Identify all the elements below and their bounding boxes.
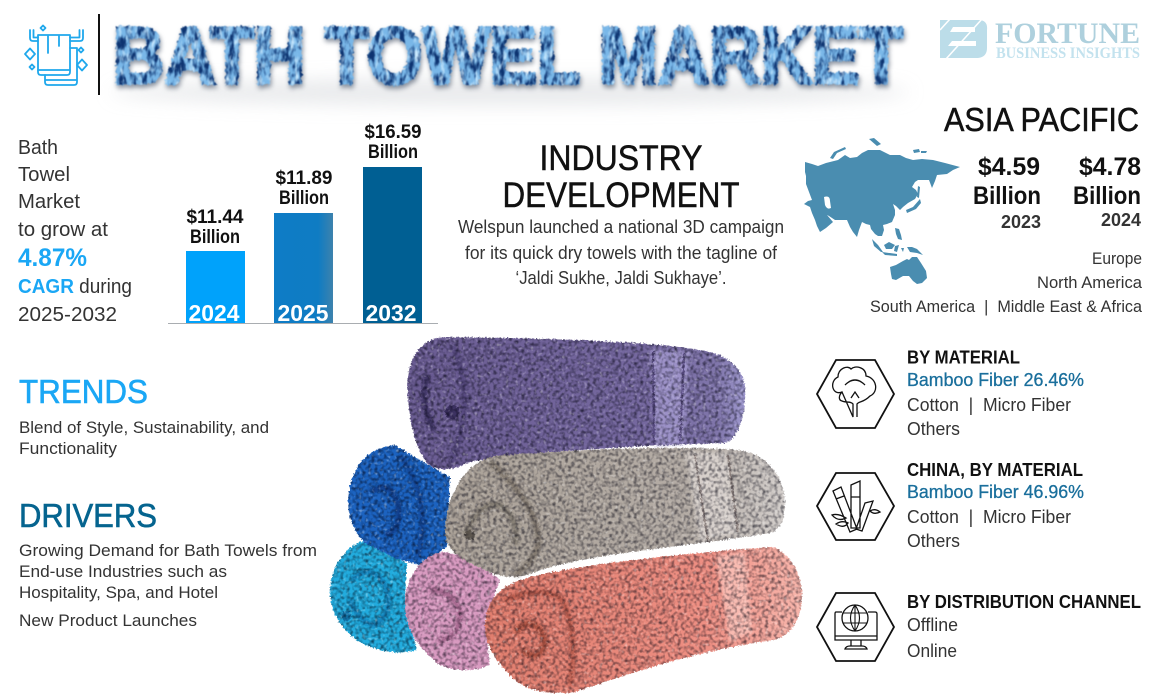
text block: CAGR summary: [18, 136, 132, 326]
towel: grey roll: [445, 448, 785, 577]
text: by material: Bamboo Fiber 26.46%: [907, 370, 1084, 390]
panel: by distribution channel: [817, 592, 1141, 661]
bar 2025: [274, 168, 333, 326]
bar 2032: Billion: [368, 142, 418, 163]
text block: industry development: [458, 217, 784, 288]
heading: industry development: INDUSTRY: [540, 139, 702, 178]
text: by distribution channel: [907, 592, 1141, 661]
icon: bamboo in hexagon: [817, 473, 894, 540]
text: China by material: [907, 460, 1084, 551]
bar 2025: $11.89: [276, 168, 332, 189]
bar 2024: $11.44: [186, 207, 244, 228]
list: other regions: South America | Middle East & Africa: [870, 298, 1143, 316]
text block: industry development: Welspun launched a national 3D campaign: [458, 217, 784, 237]
heading: industry development: [502, 139, 740, 215]
stat: Asia Pacific 2024: [1073, 153, 1141, 230]
text: China by material: Bamboo Fiber 46.96%: [907, 482, 1084, 502]
text: by distribution channel: Online: [907, 641, 957, 661]
text block: trends: Functionality: [19, 439, 118, 458]
bar 2024: [186, 207, 245, 326]
bar 2024: 2024: [188, 300, 240, 326]
logo tagline: BUSINESS INSIGHTS: [996, 45, 1140, 62]
list: other regions: North America: [1037, 274, 1143, 292]
panel: by material: [817, 348, 1084, 439]
stat: Asia Pacific 2024: Billion: [1073, 182, 1141, 210]
text block: CAGR summary: 4.87%: [18, 244, 87, 272]
header divider: [98, 14, 100, 95]
stat: Asia Pacific 2024: 2024: [1101, 210, 1141, 230]
text block: CAGR summary: CAGR during: [18, 275, 132, 298]
bar 2025: Billion: [279, 188, 329, 209]
logo wordmark: FORTUNE: [995, 17, 1140, 50]
title shadow: [110, 79, 910, 105]
text block: CAGR summary: Market: [18, 190, 80, 213]
text: by distribution channel: Offline: [907, 615, 958, 635]
text: China by material: Others: [907, 531, 960, 551]
heading: Asia Pacific: ASIA PACIFIC: [944, 101, 1139, 138]
heading: industry development: DEVELOPMENT: [502, 176, 740, 215]
list: other regions: Europe: [1092, 250, 1142, 268]
panel: China by material: [817, 460, 1084, 551]
title: BATH TOWEL MARKET: [113, 11, 903, 100]
text block: drivers: [19, 541, 317, 630]
text: by material: BY MATERIAL: [907, 348, 1020, 368]
text block: trends: [19, 418, 269, 458]
list: other regions: [870, 250, 1143, 316]
heading: trends: TRENDS: [19, 373, 148, 410]
stat: Asia Pacific 2023: 2023: [1001, 212, 1041, 232]
text block: industry development: ‘Jaldi Sukhe, Jaldi Sukhaye’.: [516, 268, 726, 288]
icon: cotton in hexagon: [817, 360, 894, 428]
towel: blue roll: [348, 445, 450, 565]
text block: drivers: End-use Industries such as: [19, 562, 227, 581]
stat: Asia Pacific 2024: $4.78: [1079, 153, 1141, 181]
text block: CAGR summary: Bath: [18, 136, 58, 159]
stat: Asia Pacific 2023: Billion: [973, 182, 1041, 210]
illustration: stacked towels: [330, 337, 802, 693]
logo: Fortune Business Insights: [940, 17, 1140, 62]
bar 2032: [363, 122, 422, 326]
text block: CAGR summary: 2025-2032: [18, 303, 117, 326]
text: by material: Cotton | Micro Fiber: [907, 395, 1071, 415]
icon: online monitor in hexagon: [817, 593, 894, 661]
panel: trends: [19, 373, 269, 458]
text block: CAGR summary: Towel: [18, 163, 70, 186]
bar chart: market size: [168, 122, 438, 326]
towel: coral roll: [485, 547, 802, 693]
text block: trends: Blend of Style, Sustainability, and: [19, 418, 269, 437]
text: China by material: CHINA, BY MATERIAL: [907, 460, 1083, 480]
stat: Asia Pacific 2023: $4.59: [978, 153, 1040, 181]
panel: drivers: [19, 497, 317, 630]
heading: drivers: DRIVERS: [19, 497, 157, 534]
text: by material: [907, 348, 1084, 439]
bar 2032: 2032: [366, 300, 416, 326]
bar 2025: 2025: [278, 300, 329, 326]
text: by material: Others: [907, 419, 960, 439]
bar 2032: $16.59: [364, 122, 422, 143]
text block: drivers: Growing Demand for Bath Towels from: [19, 541, 317, 560]
towel: purple roll: [408, 337, 745, 469]
text: China by material: Cotton | Micro Fiber: [907, 507, 1071, 527]
map: Asia Pacific: [804, 138, 960, 284]
logo mark: [940, 19, 987, 59]
stat: Asia Pacific 2023: [973, 153, 1041, 232]
towel: cyan roll: [330, 540, 417, 652]
text: by distribution channel: BY DISTRIBUTION CHANNEL: [907, 592, 1141, 612]
text block: drivers: Hospitality, Spa, and Hotel: [19, 583, 218, 602]
icon: towel on rack: [25, 26, 87, 85]
text block: industry development: for its quick dry towels with the tagline of: [465, 243, 778, 263]
text block: drivers: New Product Launches: [19, 611, 197, 630]
text block: CAGR summary: to grow at: [18, 218, 108, 241]
towel: pink roll: [405, 552, 500, 670]
bar 2024: Billion: [190, 227, 240, 248]
